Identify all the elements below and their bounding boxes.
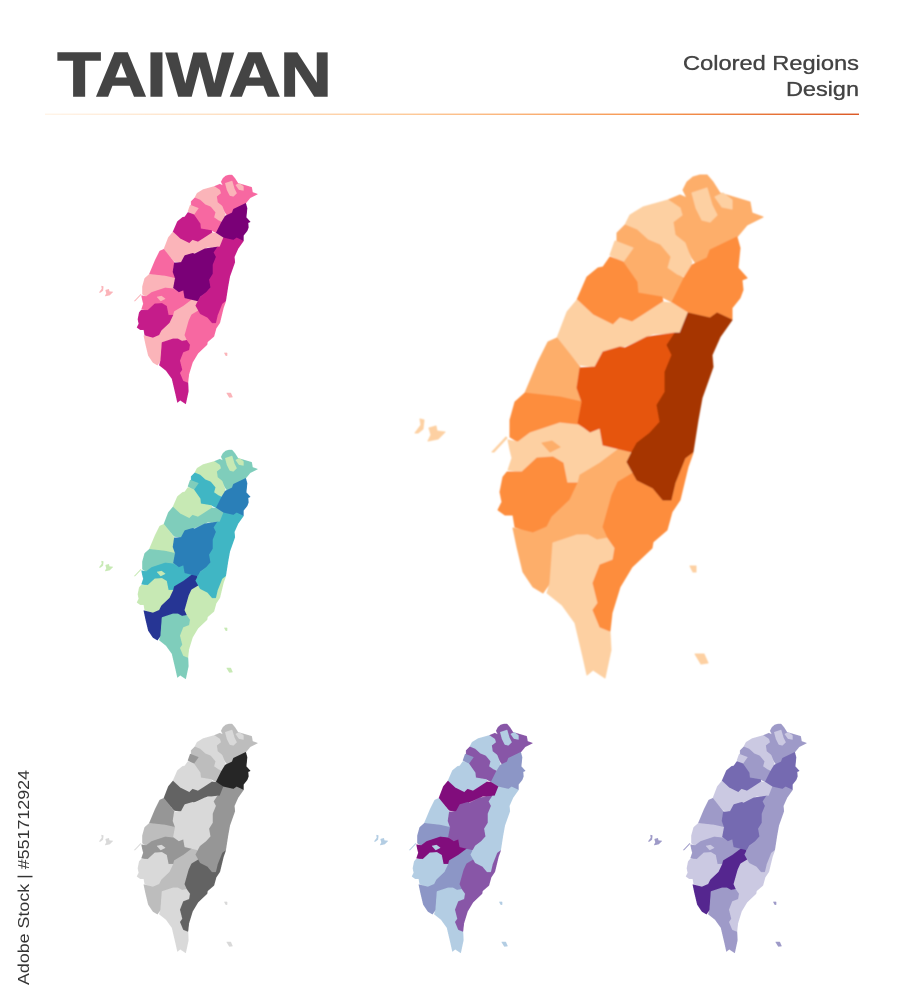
map: small gray xyxy=(99,724,258,953)
subtitle: Colored Regions xyxy=(683,52,859,75)
header rule xyxy=(45,114,859,115)
map: small blue-purple xyxy=(374,724,533,953)
subtitle: Design xyxy=(786,78,859,101)
map: large orange xyxy=(415,175,763,678)
map: small teal xyxy=(99,450,258,679)
map: small pink xyxy=(99,175,258,404)
title: TAIWAN xyxy=(58,41,332,110)
subtitle xyxy=(683,52,859,101)
stock id caption: Adobe Stock | #551712924 xyxy=(16,770,33,985)
map: small purple xyxy=(648,724,807,953)
